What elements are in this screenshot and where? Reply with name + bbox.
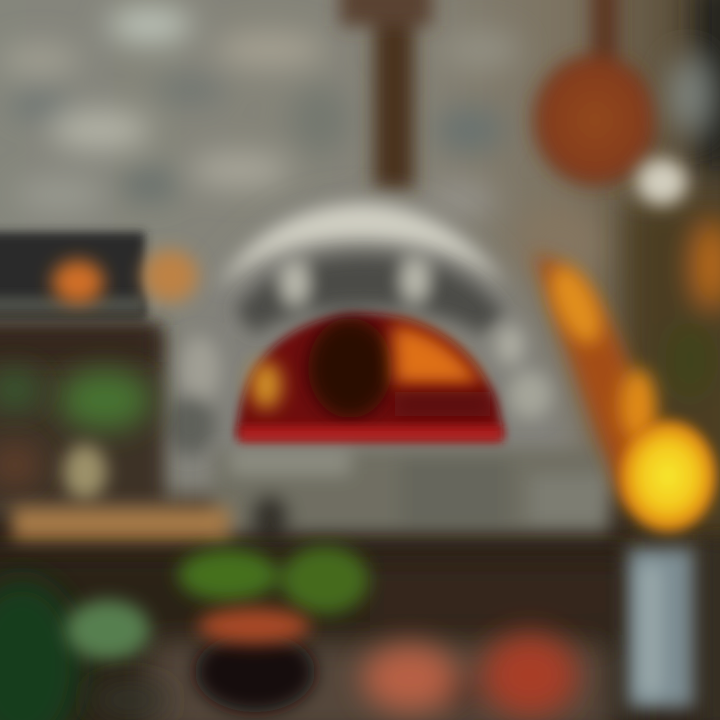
wooden board [12, 507, 230, 543]
right-hand shelf in shadow [625, 0, 720, 540]
foliage: bottom left [0, 580, 170, 720]
oven: stone arch [165, 200, 580, 470]
left niche: small oven with fire [0, 232, 198, 320]
oven base: stone front [214, 449, 610, 542]
metal canister [628, 540, 720, 720]
glowing embers: yellow left [250, 361, 282, 409]
arch: outer dome [165, 200, 580, 470]
hearth: red lip [240, 426, 502, 443]
white hanging ball [637, 159, 687, 205]
foreground: dark counter [0, 552, 640, 720]
herbs: green leaves [59, 370, 151, 430]
left shelf: dark wood and herbs [0, 325, 165, 510]
flames [535, 255, 720, 538]
hanging copper pan [533, 0, 657, 186]
oven mouth: fire chamber [237, 314, 503, 443]
tomatoes [362, 633, 578, 717]
jar: pale [63, 444, 107, 500]
arch: dark voussoir stones [165, 255, 552, 455]
green basil [178, 546, 369, 614]
bowl of sauce [195, 608, 315, 712]
glowing embers: orange right [392, 325, 482, 385]
chimney [340, 0, 432, 190]
